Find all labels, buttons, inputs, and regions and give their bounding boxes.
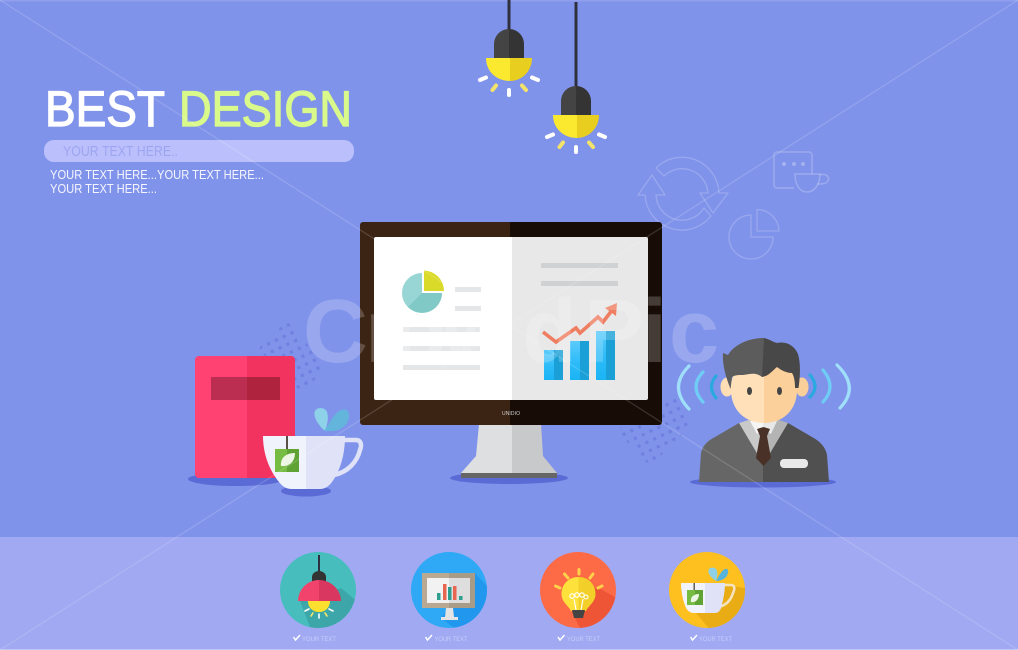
monitor stand bbox=[461, 424, 557, 478]
bar chart bbox=[544, 331, 615, 380]
bottom band bbox=[0, 537, 1018, 650]
label 3: YOUR TEXT bbox=[567, 636, 600, 643]
hanging lamp 2 bbox=[547, 2, 605, 152]
outline icon: pie chart bbox=[729, 209, 779, 259]
monitor stand shadow bbox=[450, 472, 568, 484]
outline icon: refresh bbox=[638, 157, 728, 230]
dotted patch right bbox=[616, 394, 692, 466]
cup handle bbox=[334, 440, 361, 475]
title: BEST bbox=[45, 81, 165, 137]
shirt collar bbox=[739, 419, 788, 465]
icon: lamp badge bbox=[280, 552, 356, 628]
eyes bbox=[747, 387, 782, 395]
label 4 bbox=[690, 635, 732, 643]
body text: YOUR TEXT HERE...YOUR TEXT HERE... bbox=[50, 168, 264, 182]
person bbox=[678, 338, 849, 488]
person shadow bbox=[690, 476, 836, 488]
pie chart bbox=[402, 270, 444, 313]
monitor brand: UNIDIO bbox=[502, 411, 520, 417]
hair bbox=[723, 338, 800, 389]
label 2: YOUR TEXT bbox=[434, 636, 468, 643]
title: DESIGN bbox=[179, 81, 352, 137]
label 1 bbox=[294, 635, 336, 643]
tie bbox=[756, 427, 771, 466]
icon: tea cup badge bbox=[669, 552, 745, 628]
label 1: YOUR TEXT bbox=[302, 636, 336, 643]
trend arrow bbox=[543, 303, 617, 342]
subtitle pill: YOUR TEXT HERE.. bbox=[63, 144, 178, 160]
cup shadow bbox=[281, 486, 331, 496]
book shadow bbox=[188, 472, 284, 486]
cup body bbox=[263, 436, 345, 489]
book bbox=[188, 356, 295, 486]
label 4: YOUR TEXT bbox=[699, 636, 732, 643]
dotted patch left bbox=[258, 320, 326, 393]
hanging lamp 1 bbox=[480, 0, 538, 95]
ears bbox=[720, 378, 808, 396]
body text bbox=[50, 168, 264, 196]
sound waves bbox=[678, 365, 849, 409]
label 2 bbox=[426, 635, 468, 643]
outline icon: chat and cup bbox=[774, 152, 829, 192]
subtitle pill bbox=[44, 140, 354, 162]
right text lines bbox=[541, 263, 618, 286]
watermark: CrowdPic bbox=[303, 282, 719, 382]
tea cup bbox=[263, 408, 361, 496]
monitor bbox=[360, 222, 662, 484]
icon: light bulb badge bbox=[540, 552, 616, 628]
book label bbox=[211, 377, 280, 400]
label 3 bbox=[558, 635, 600, 643]
left text lines bbox=[403, 287, 481, 370]
monitor bezel bbox=[360, 222, 662, 425]
tea tag bbox=[275, 436, 299, 472]
suit bbox=[699, 423, 829, 482]
monitor screen bbox=[374, 237, 648, 400]
face bbox=[731, 360, 797, 423]
body text: YOUR TEXT HERE... bbox=[50, 182, 157, 196]
title bbox=[45, 81, 352, 137]
water drops bbox=[314, 408, 349, 431]
name tag bbox=[780, 459, 808, 468]
icon: monitor badge bbox=[411, 552, 487, 628]
